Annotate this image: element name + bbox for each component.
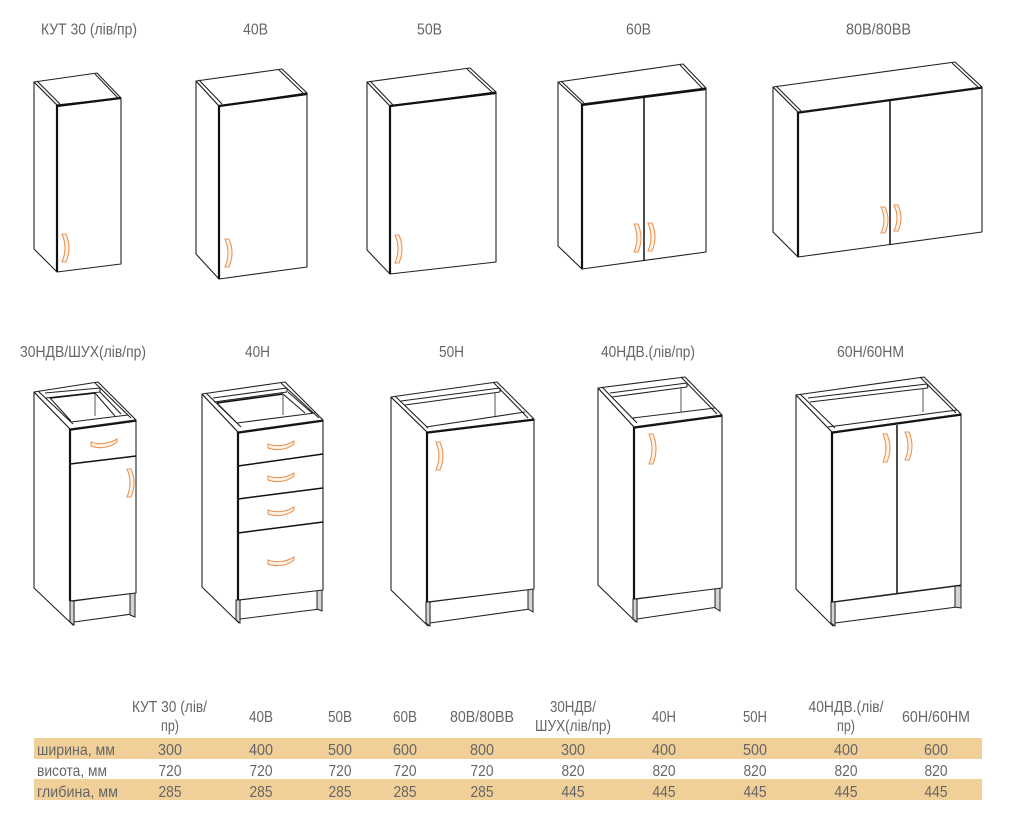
table row: висота: 720 — [394, 763, 417, 780]
table: column headers: ШУХ(лів/пр) — [535, 718, 611, 735]
table row: висота: 720 — [470, 763, 494, 780]
table row: глибина: 285 — [394, 784, 417, 801]
table row: ширина: 600 — [393, 742, 417, 759]
table row: глибина: 285 — [250, 784, 273, 801]
panel: wall cabinet titles: 60В — [626, 22, 651, 38]
table row: ширина: 800 — [470, 742, 494, 759]
panel: base cabinet titles — [20, 344, 904, 361]
table row: висота: 820 — [744, 763, 767, 780]
cabinet: 40Н base unit with drawers — [202, 382, 323, 623]
cabinet: КУТ 30 wall unit — [34, 73, 121, 272]
table row: глибина: 445 — [924, 784, 948, 801]
table row: глибина: 445 — [562, 784, 585, 801]
table: column headers: 60В — [393, 709, 417, 726]
table: column headers: 40НДВ.(лів/ — [808, 699, 884, 716]
table row: ширина: 500 — [743, 742, 767, 759]
table row: висота: 720 — [158, 763, 182, 780]
table row: ширина: 600 — [924, 742, 948, 759]
table: highlighted row bands — [34, 738, 982, 800]
table row: висота: 820 — [834, 763, 858, 780]
table: column headers: 30НДВ/ — [550, 699, 596, 716]
table row: глибина: 445 — [744, 784, 767, 801]
panel: wall cabinet titles: 80В/80ВВ — [846, 22, 911, 38]
table: column headers: 50В — [328, 709, 352, 726]
table row: глибина — [37, 784, 948, 801]
table row: глибина: 445 — [834, 784, 858, 801]
table row: ширина — [37, 742, 948, 759]
table: column headers: 50Н — [743, 709, 767, 726]
panel: base cabinet titles: 60Н/60НМ — [837, 344, 904, 361]
cabinet: 60В wall unit — [558, 64, 706, 269]
cabinet: 40В wall unit — [196, 69, 307, 279]
panel: base cabinet titles: 30НДВ/ШУХ(лів/пр) — [20, 344, 146, 361]
cabinet: 50Н base unit — [391, 382, 534, 626]
table row: ширина: 300 — [561, 742, 585, 759]
table: column headers: 60Н/60НМ — [902, 709, 970, 726]
cabinet: 30НДВ/ШУХ base unit — [34, 382, 136, 625]
cabinet: 50В wall unit — [367, 68, 496, 274]
table: column headers: пр) — [837, 718, 855, 735]
table row: висота: 720 — [328, 763, 352, 780]
table row: висота: 820 — [924, 763, 948, 780]
table: column headers: пр) — [161, 718, 179, 735]
table row: ширина: ширина, мм — [37, 742, 115, 759]
panel: wall cabinet titles: КУТ 30 (лів/пр) — [41, 22, 137, 38]
panel: base cabinet titles: 40Н — [245, 344, 270, 361]
table row: висота: 720 — [250, 763, 273, 780]
table row: ширина: 400 — [249, 742, 273, 759]
table: column headers — [132, 699, 970, 735]
cabinet: 80В/80ВВ wall unit — [773, 62, 982, 257]
table row: глибина: глибина, мм — [37, 784, 118, 801]
table row: ширина: 400 — [652, 742, 676, 759]
table row: висота: 820 — [652, 763, 676, 780]
table row: глибина: 285 — [158, 784, 182, 801]
table row: висота — [37, 763, 948, 780]
cabinet: 40НДВ base unit — [598, 377, 722, 622]
table row: ширина: 400 — [834, 742, 858, 759]
panel: wall cabinet titles — [41, 22, 911, 38]
table: dimensions — [34, 699, 982, 801]
table row: глибина: 285 — [328, 784, 352, 801]
table row: ширина: 500 — [328, 742, 352, 759]
table: column headers: КУТ 30 (лів/ — [132, 699, 207, 716]
table: column headers: 40В — [249, 709, 273, 726]
table: column headers: 40Н — [652, 709, 676, 726]
table row: глибина: 445 — [652, 784, 676, 801]
panel: wall cabinet titles: 50В — [417, 22, 442, 38]
cabinet: 60Н/60НМ base unit — [796, 377, 961, 626]
table row: ширина: 300 — [158, 742, 182, 759]
table row: висота: висота, мм — [37, 763, 107, 780]
panel: base cabinet titles: 40НДВ.(лів/пр) — [601, 344, 695, 361]
table row: висота: 820 — [562, 763, 585, 780]
table: column headers: 80В/80ВВ — [450, 709, 514, 726]
table row: глибина: 285 — [470, 784, 494, 801]
panel: wall cabinet titles: 40В — [243, 22, 268, 38]
panel: base cabinet titles: 50Н — [439, 344, 464, 361]
